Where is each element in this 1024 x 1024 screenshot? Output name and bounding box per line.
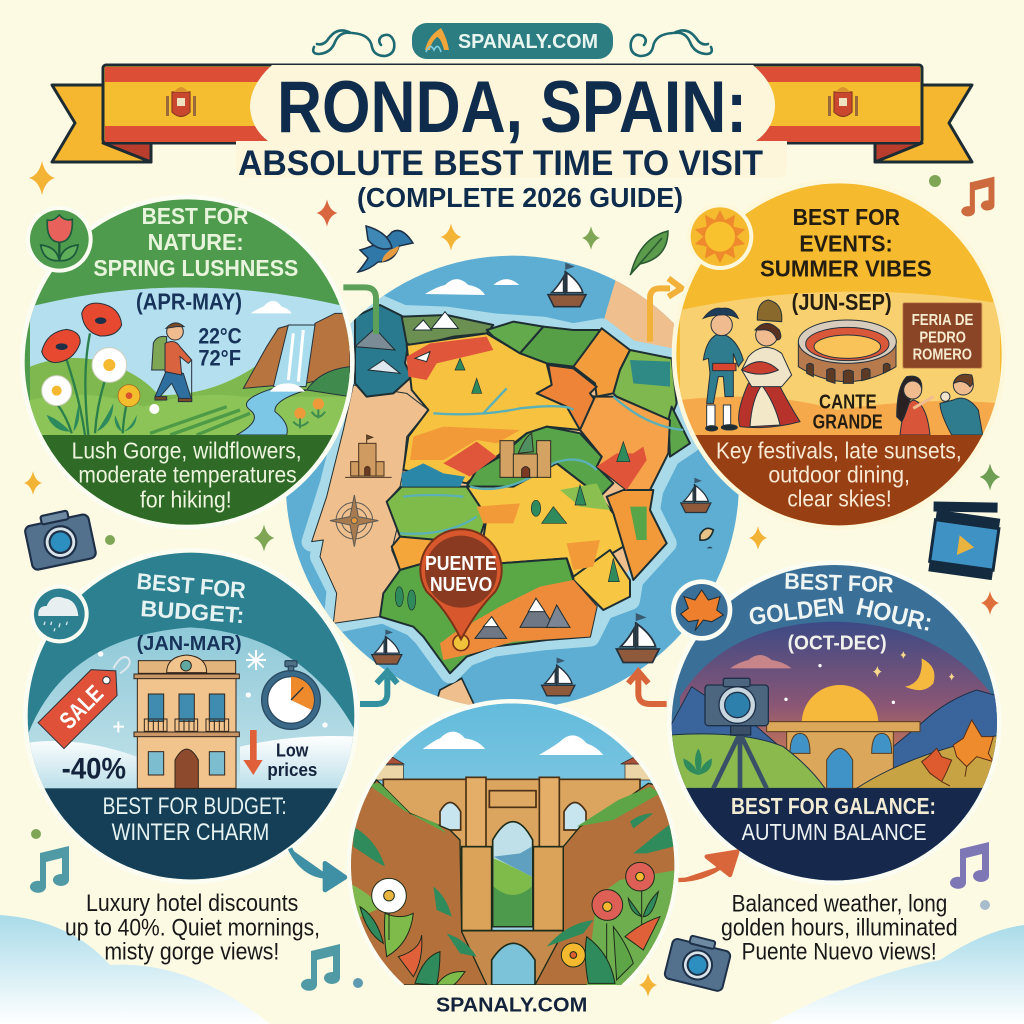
france land [604,280,674,348]
low prices label: prices [267,759,317,780]
hills [30,358,353,435]
winter sky [28,627,357,788]
heading: budget [136,568,247,628]
heading: budget: BUDGET: [140,595,245,628]
bullring [798,320,896,383]
cante grande label: CANTE [819,391,877,413]
arrow: nature to map [343,287,376,334]
cante grande label: GRANDE [813,411,883,433]
left gorge [347,780,487,985]
cloud [730,655,792,668]
temperature: 72°F [198,346,241,371]
mountains [670,687,1000,788]
bridge upper [383,777,640,849]
description: golden hour: golden hours, illuminated [721,915,958,942]
discount label: -40% [62,752,126,785]
wildflowers [42,303,325,435]
description: nature [72,437,302,512]
ships [372,263,713,696]
logo badge [313,23,712,59]
heading: events: EVENTS: [799,231,893,257]
region patches [402,337,670,660]
description: budget: misty gorge views! [104,938,279,965]
map pin: Puente Nuevo [420,529,502,651]
plaque text: ROMERO [913,346,972,363]
events backdrop [680,291,1000,437]
flowers [360,862,660,985]
sea [286,256,739,709]
description: nature: moderate temperatures [78,462,297,488]
months: Apr-May: (APR-MAY) [136,288,242,314]
icon badge: rain cloud [30,585,89,643]
central arch view [493,822,533,927]
trees [395,358,630,610]
panel: events [672,179,1007,532]
heading: golden hour: HOUR: [854,594,935,637]
description: nature: Lush Gorge, wildflowers, [72,437,302,463]
coast halo [312,305,690,673]
decorative stars and notes [24,161,1000,997]
singers [897,374,983,435]
bottom band [42,435,333,525]
banner folds [103,143,922,162]
description: events: outdoor dining, [768,461,910,487]
icon badge: tulip [26,206,93,273]
arrow: budget to map [360,672,397,704]
arrow: golden to map [628,672,667,704]
description: budget: up to 40%. Quiet mornings, [65,914,320,941]
panel: golden hour [667,560,1003,965]
band text: budget: BEST FOR BUDGET: [103,793,287,820]
map pin: Puente Nuevo: PUENTE [425,552,497,575]
footer site name: SPANALY.COM [436,994,587,1017]
band text: golden hour [731,793,936,845]
heading: nature: SPRING LUSHNESS [93,255,298,281]
bridge piers [462,847,563,986]
description: events: Key festivals, late sunsets, [716,437,962,463]
banner flag stripes [103,65,922,143]
band text: golden hour: BEST FOR GALANCE: [731,793,936,819]
plaque text [912,312,973,363]
icon badge: sun [687,203,753,270]
guide line: (COMPLETE 2026 GUIDE) [357,182,683,213]
icon: bird [358,226,413,272]
stopwatch [262,661,320,729]
waterfall [243,313,350,397]
tag string [113,657,130,673]
map circle [286,256,739,723]
morocco land [437,677,474,705]
heading: nature: NATURE: [148,229,244,255]
icon badge: maple leaf [671,579,732,641]
cloud [251,301,292,313]
description: budget: Luxury hotel discounts [86,890,298,917]
heading: events: BEST FOR [793,204,900,230]
snow [23,736,357,788]
heading: events: SUMMER VIBES [760,256,932,282]
icon: film clapper [924,494,1002,580]
cante grande label [813,391,883,433]
heading: golden hour: BEST FOR [784,568,894,597]
title banner [52,65,972,183]
heading: golden hour: GOLDEN [747,592,846,631]
months: Jan-Mar: (JAN-MAR) [137,632,242,655]
icon: castle center [500,433,551,477]
band text: golden hour: AUTUMN BALANCE [742,819,927,845]
corner clouds [0,915,1024,1024]
river [237,388,307,435]
right gorge [535,783,680,985]
band text: budget: WINTER CHARM [112,819,269,846]
months: Oct-Dec: (OCT-DEC) [788,631,887,654]
arrow: map to events [650,278,682,342]
setting sun [802,685,878,722]
icon: leaf [630,231,668,275]
map pin: Puente Nuevo: NUEVO [430,573,492,596]
icon: camera left [23,507,97,571]
regions [312,305,690,673]
rivers [400,388,683,534]
description: nature: for hiking! [140,486,232,512]
down arrow [243,730,263,775]
heading: nature: BEST FOR [142,203,248,229]
description: golden hour [721,891,958,965]
heading: budget: BEST FOR [136,568,247,603]
left hill [670,734,825,788]
dusk sky [680,622,993,788]
autumn leaves [922,720,993,786]
camera on tripod [705,678,768,735]
mountains [355,312,570,638]
panel: bridge illustration [347,699,680,1024]
right hill [857,735,1000,788]
sale tag [38,658,129,749]
low prices label: Low [276,740,309,761]
coat of arms right [828,87,858,116]
bottom band [44,788,338,880]
description: golden hour: Puente Nuevo views! [742,938,937,965]
description: events: clear skies! [787,486,892,512]
low prices label [267,740,317,780]
description: budget [65,890,320,965]
subtitle: ABSOLUTE BEST TIME TO VISIT [238,144,763,183]
banner left tail [52,85,151,162]
plant [683,748,712,775]
heading: nature [93,203,298,281]
months: Jun-Sep: (JUN-SEP) [792,289,892,315]
plaque [903,303,982,368]
torero [703,308,743,431]
icon: camera bottom right [664,931,733,992]
title: RONDA, SPAIN: [277,67,747,148]
description: golden hour: Balanced weather, long [732,891,947,918]
plaque text: PEDRO [919,329,966,346]
arrow: budget to bridge [290,848,345,890]
bridge [767,722,920,788]
panel: budget [23,548,360,965]
bottom band [696,435,982,526]
icon: castle portugal [345,435,392,477]
bottom band [667,788,1003,885]
icon: compass [330,495,378,547]
hiker [152,323,192,402]
flamenca [739,300,800,428]
town houses [375,757,652,780]
moon [905,658,934,690]
logo badge: SPANALY.COM [458,31,598,53]
lower arch [492,943,535,985]
sale tag: SALE [55,680,109,735]
hotel building [134,655,239,788]
temperature [198,323,242,371]
cloud [425,279,485,295]
spring sky [30,287,347,435]
clouds [423,732,603,755]
arrow: bridge to golden [678,852,737,880]
heading: events [760,204,932,282]
plaque text: FERIA DE [912,312,973,329]
temperature: 22°C [198,323,242,348]
panel: nature [20,195,357,532]
band text: budget [103,793,287,846]
cream title plate [236,65,787,178]
heading: golden hour [747,568,935,637]
tripod [713,733,767,788]
coat of arms left [166,87,196,116]
description: events [716,437,962,512]
banner right tail [875,85,972,162]
